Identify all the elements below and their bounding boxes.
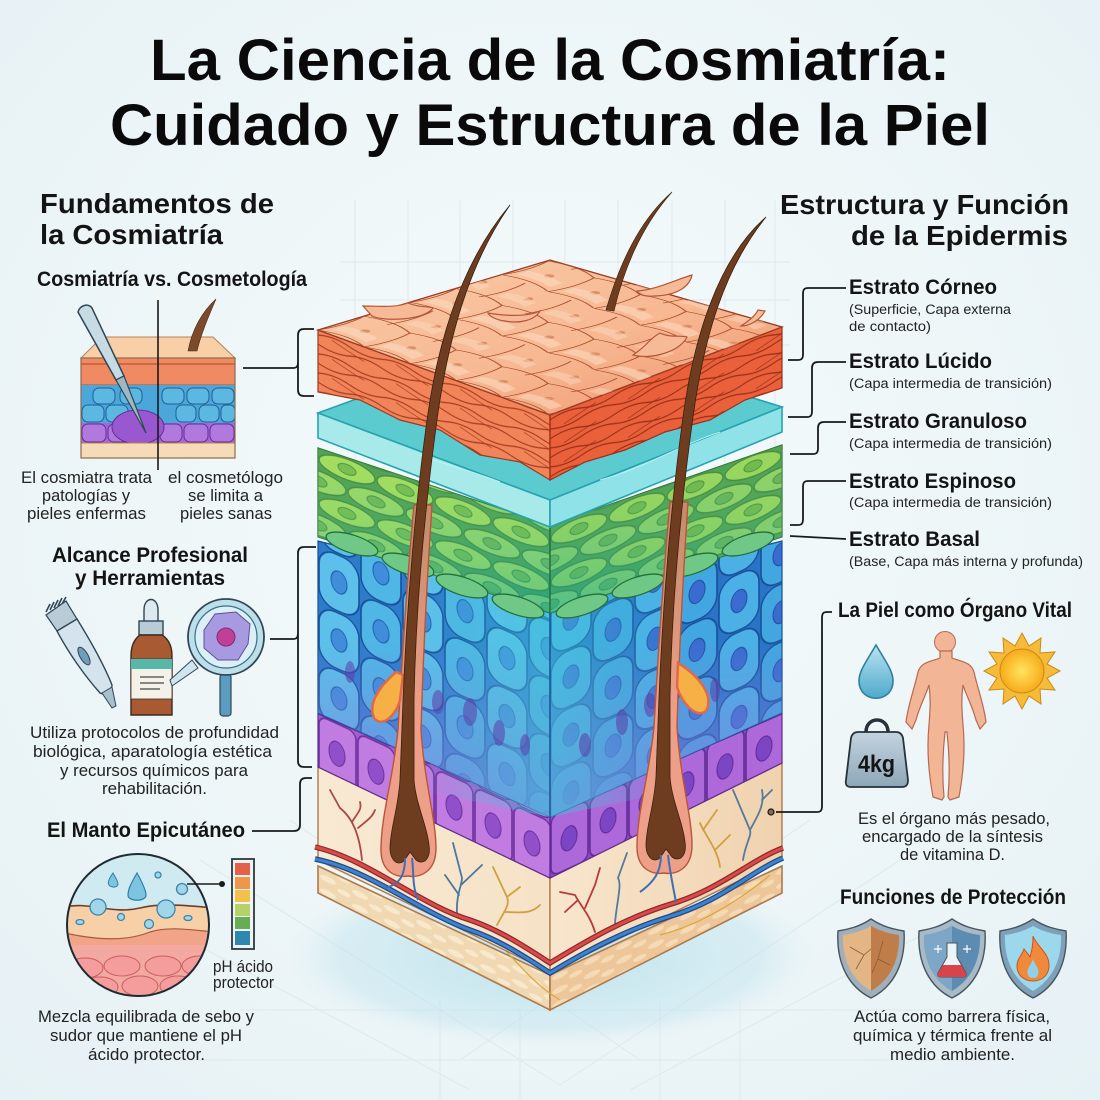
floor shadow <box>285 863 815 1047</box>
text: alcance: Utiliza protocolos de profundidad <box>30 724 279 742</box>
dark gaps between lower cells <box>345 661 720 757</box>
layer: hypodermis fat <box>318 866 782 1010</box>
icon: water drop <box>859 645 893 698</box>
lower bumpy cells <box>324 527 776 623</box>
label: estrato granuloso: Estrato Granuloso <box>849 410 1027 433</box>
heading: alcance profesional <box>52 544 248 590</box>
panel: fundamentos de la cosmiatría <box>21 188 307 1064</box>
icon: human body <box>906 632 986 800</box>
heading: cosmiatría vs cosmetología: Cosmiatría vs. Cosmetología <box>37 268 307 291</box>
icon: chemical shield <box>919 919 985 998</box>
text: alcance: y recursos químicos para <box>60 762 249 780</box>
text: protección: medio ambiente. <box>890 1046 1015 1064</box>
icon: 4kg weight: 4kg <box>858 751 895 778</box>
icon: pH strip <box>187 859 254 949</box>
heading: fundamentos <box>40 188 274 250</box>
connector: órgano vital <box>768 612 832 815</box>
text: alcance <box>30 724 279 798</box>
label: estrato córneo: de contacto) <box>849 319 931 334</box>
icon: sun <box>984 633 1060 709</box>
text: protección: química y térmica frente al <box>853 1027 1052 1045</box>
label: estrato espinoso: Estrato Espinoso <box>849 470 1016 493</box>
layer: estrato córneo <box>318 260 782 480</box>
blood vessels <box>315 847 783 973</box>
title: La Ciencia de la Cosmiatría: <box>150 28 950 93</box>
label: estrato lúcido: (Capa intermedia de transición) <box>849 376 1052 391</box>
text: cosmiatra: patologías y <box>42 487 131 505</box>
panel: estructura y función de la epidermis <box>768 189 1083 1064</box>
label: pH ácido protector: pH ácido <box>213 958 273 976</box>
icon: aesthetic device <box>46 597 116 708</box>
text: cosmiatra: El cosmiatra trata <box>21 469 153 487</box>
icon: physical shield <box>838 919 904 998</box>
text: protección: Actúa como barrera física, <box>854 1008 1050 1026</box>
heading: alcance profesional: Alcance Profesional <box>52 544 248 567</box>
label: estrato granuloso: (Capa intermedia de transición) <box>849 436 1052 451</box>
label: estrato basal <box>849 528 1083 569</box>
label: estrato granuloso <box>849 410 1052 451</box>
heading: estructura: Estructura y Función <box>780 189 1069 220</box>
label: estrato basal: Estrato Basal <box>849 528 980 551</box>
label: pH ácido protector <box>213 958 274 992</box>
heading: estructura <box>780 189 1069 251</box>
text: cosmiatra: pieles enfermas <box>27 505 146 523</box>
text: manto: ácido protector. <box>88 1046 205 1064</box>
text: alcance: biológica, aparatología estética <box>33 743 273 761</box>
label: estrato lúcido: Estrato Lúcido <box>849 350 992 373</box>
layer: estrato lúcido translucent plate <box>318 372 782 527</box>
text: manto: sudor que mantiene el pH <box>50 1027 242 1045</box>
text: protección <box>853 1008 1052 1064</box>
label: estrato espinoso <box>849 470 1052 510</box>
label: estrato espinoso: (Capa intermedia de transición) <box>849 495 1052 510</box>
icon: skin mantle circle <box>66 853 210 997</box>
connectors: left braces <box>243 329 316 831</box>
text: cosmiatra <box>21 469 153 523</box>
text: órgano vital: de vitamina D. <box>900 846 1005 864</box>
hair follicle right <box>637 217 766 902</box>
layer: estrato granuloso green cells <box>318 445 782 623</box>
icon: magnifier with cell <box>170 599 264 716</box>
label: estrato córneo: (Superficie, Capa externa <box>849 302 1012 317</box>
chart: skin cross-section block <box>285 192 815 1047</box>
icon: mini skin block with pen <box>78 299 235 470</box>
title <box>110 28 990 158</box>
flakes <box>363 275 765 356</box>
layer: dermis <box>318 763 782 972</box>
title: Cuidado y Estructura de la Piel <box>110 93 990 158</box>
text: cosmetólogo <box>168 469 283 523</box>
text: manto: Mezcla equilibrada de sebo y <box>38 1008 255 1026</box>
label: pH ácido protector: protector <box>213 974 274 992</box>
heading: alcance profesional: y Herramientas <box>75 567 225 590</box>
hair shaft centre <box>606 192 672 311</box>
text: órgano vital: Es el órgano más pesado, <box>858 810 1050 828</box>
connectors: strata <box>788 288 846 539</box>
text: cosmetólogo: el cosmetólogo <box>168 469 283 487</box>
text: manto <box>38 1008 255 1064</box>
label: estrato lúcido <box>849 350 1052 391</box>
icon: thermal shield <box>1000 919 1066 998</box>
heading: fundamentos: Fundamentos de <box>40 188 274 219</box>
heading: manto epicutáneo: El Manto Epicutáneo <box>47 819 245 842</box>
label: estrato córneo <box>849 276 1012 334</box>
text: órgano vital <box>858 810 1050 864</box>
heading: fundamentos: la Cosmiatría <box>40 219 223 250</box>
layer: estrato basal purple cells <box>318 714 782 878</box>
heading: funciones de protección: Funciones de Protección <box>840 886 1066 909</box>
icon: dropper bottle <box>131 600 172 715</box>
heading: piel como órgano vital: La Piel como Órgano Vital <box>838 598 1072 622</box>
icon: 4kg weight <box>846 720 908 787</box>
layer: estrato espinoso blue cells <box>318 541 782 817</box>
label: estrato basal: (Base, Capa más interna y profunda) <box>849 554 1083 569</box>
text: órgano vital: encargado de la síntesis <box>862 828 1043 846</box>
text: cosmetólogo: se limita a <box>188 487 264 505</box>
text: alcance: rehabilitación. <box>102 780 207 798</box>
text: cosmetólogo: pieles sanas <box>180 505 272 523</box>
hair follicle left <box>372 205 510 900</box>
label: estrato córneo: Estrato Córneo <box>849 276 997 299</box>
heading: estructura: de la Epidermis <box>851 220 1068 251</box>
